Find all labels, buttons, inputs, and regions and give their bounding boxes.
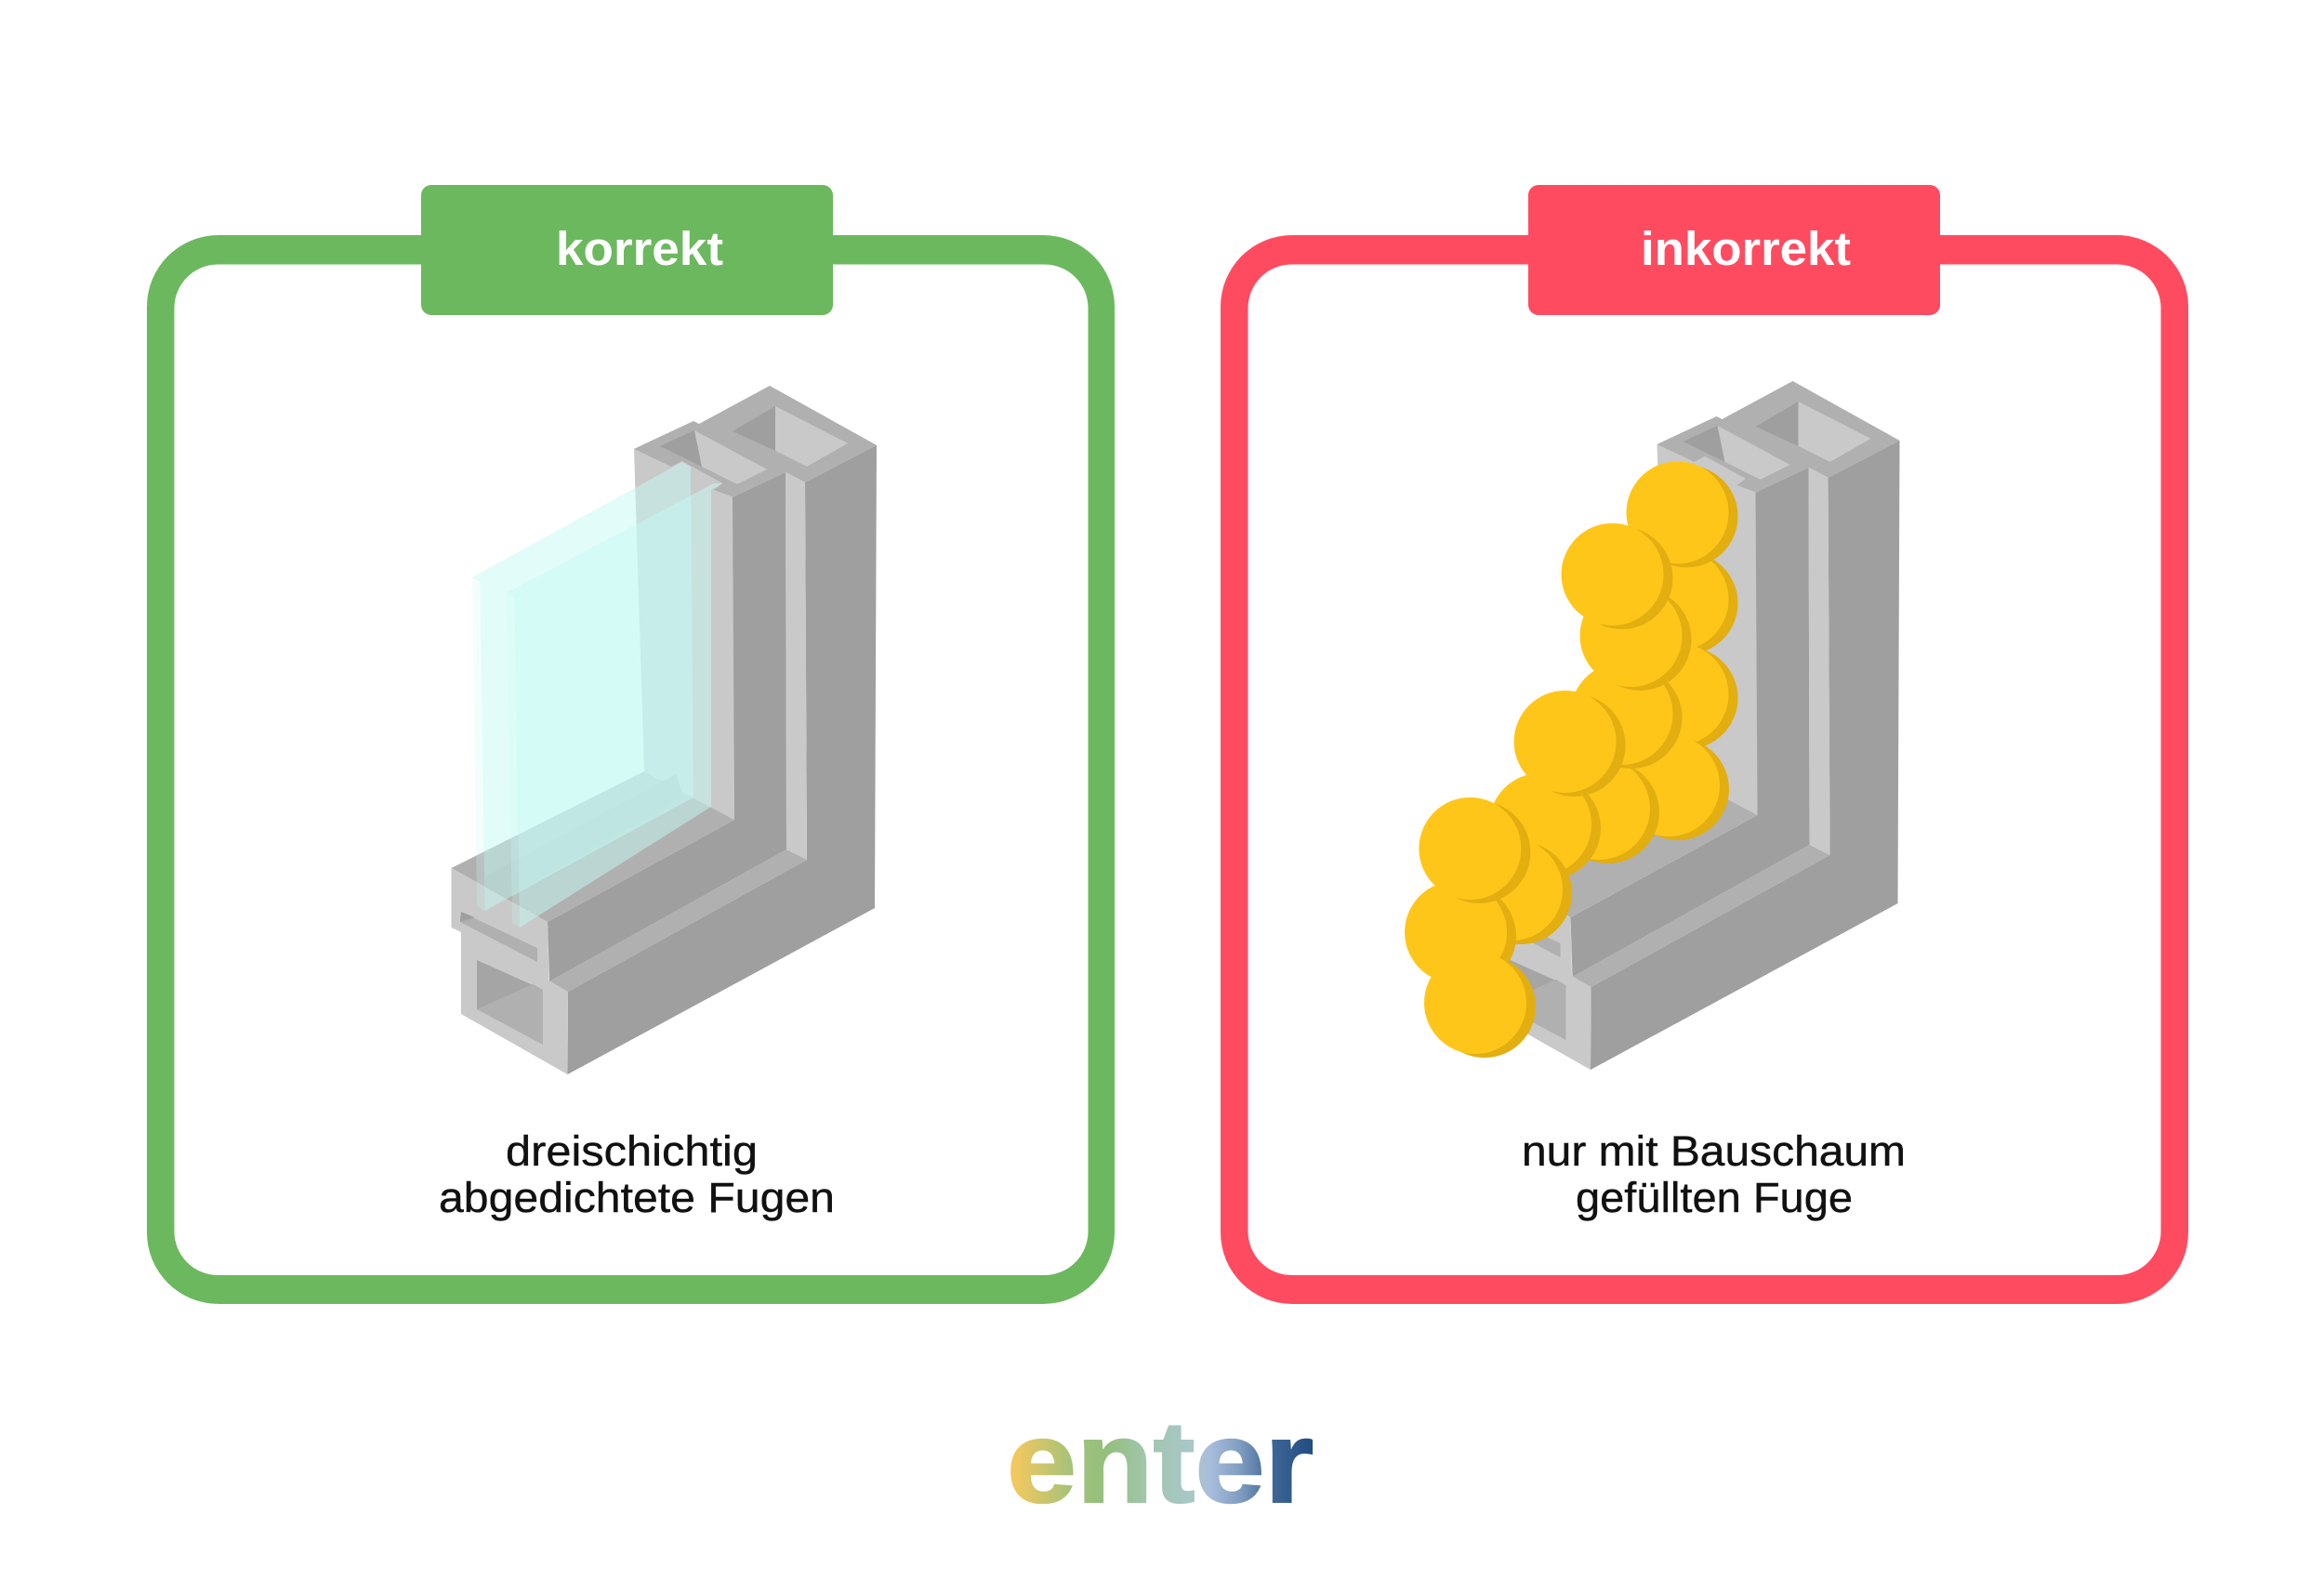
double glass panes	[472, 462, 723, 928]
illustration: window profile with glass panes	[452, 386, 877, 1074]
window frame profile	[1474, 381, 1900, 1070]
logo: enter: enter	[1007, 1398, 1314, 1527]
construction foam blobs	[1405, 461, 1738, 1058]
caption: nur mit Bauschaum gefüllten Fuge	[1522, 1127, 1906, 1221]
heading tag: inkorrekt: inkorrekt	[1641, 222, 1851, 275]
caption: nur mit Bauschaum gefüllten Fuge: nur mit Bauschaum	[1522, 1127, 1906, 1175]
window frame profile	[452, 386, 877, 1074]
caption: nur mit Bauschaum gefüllten Fuge: gefüllten Fuge	[1576, 1174, 1853, 1221]
caption: dreischichtig abgedichtete Fugen: abgedichtete Fugen	[439, 1174, 835, 1221]
heading tag: korrekt	[421, 185, 833, 315]
panel: inkorrekt	[1221, 185, 2188, 1304]
heading tag: korrekt: korrekt	[556, 222, 723, 275]
caption: dreischichtig abgedichtete Fugen	[439, 1127, 835, 1221]
green rounded frame	[147, 235, 1115, 1304]
panel: korrekt	[147, 185, 1115, 1304]
heading tag: inkorrekt	[1528, 185, 1940, 315]
caption: dreischichtig abgedichtete Fugen: dreischichtig	[506, 1127, 758, 1175]
red rounded frame	[1221, 235, 2188, 1304]
illustration: window profile with foam blobs	[1405, 381, 1900, 1070]
